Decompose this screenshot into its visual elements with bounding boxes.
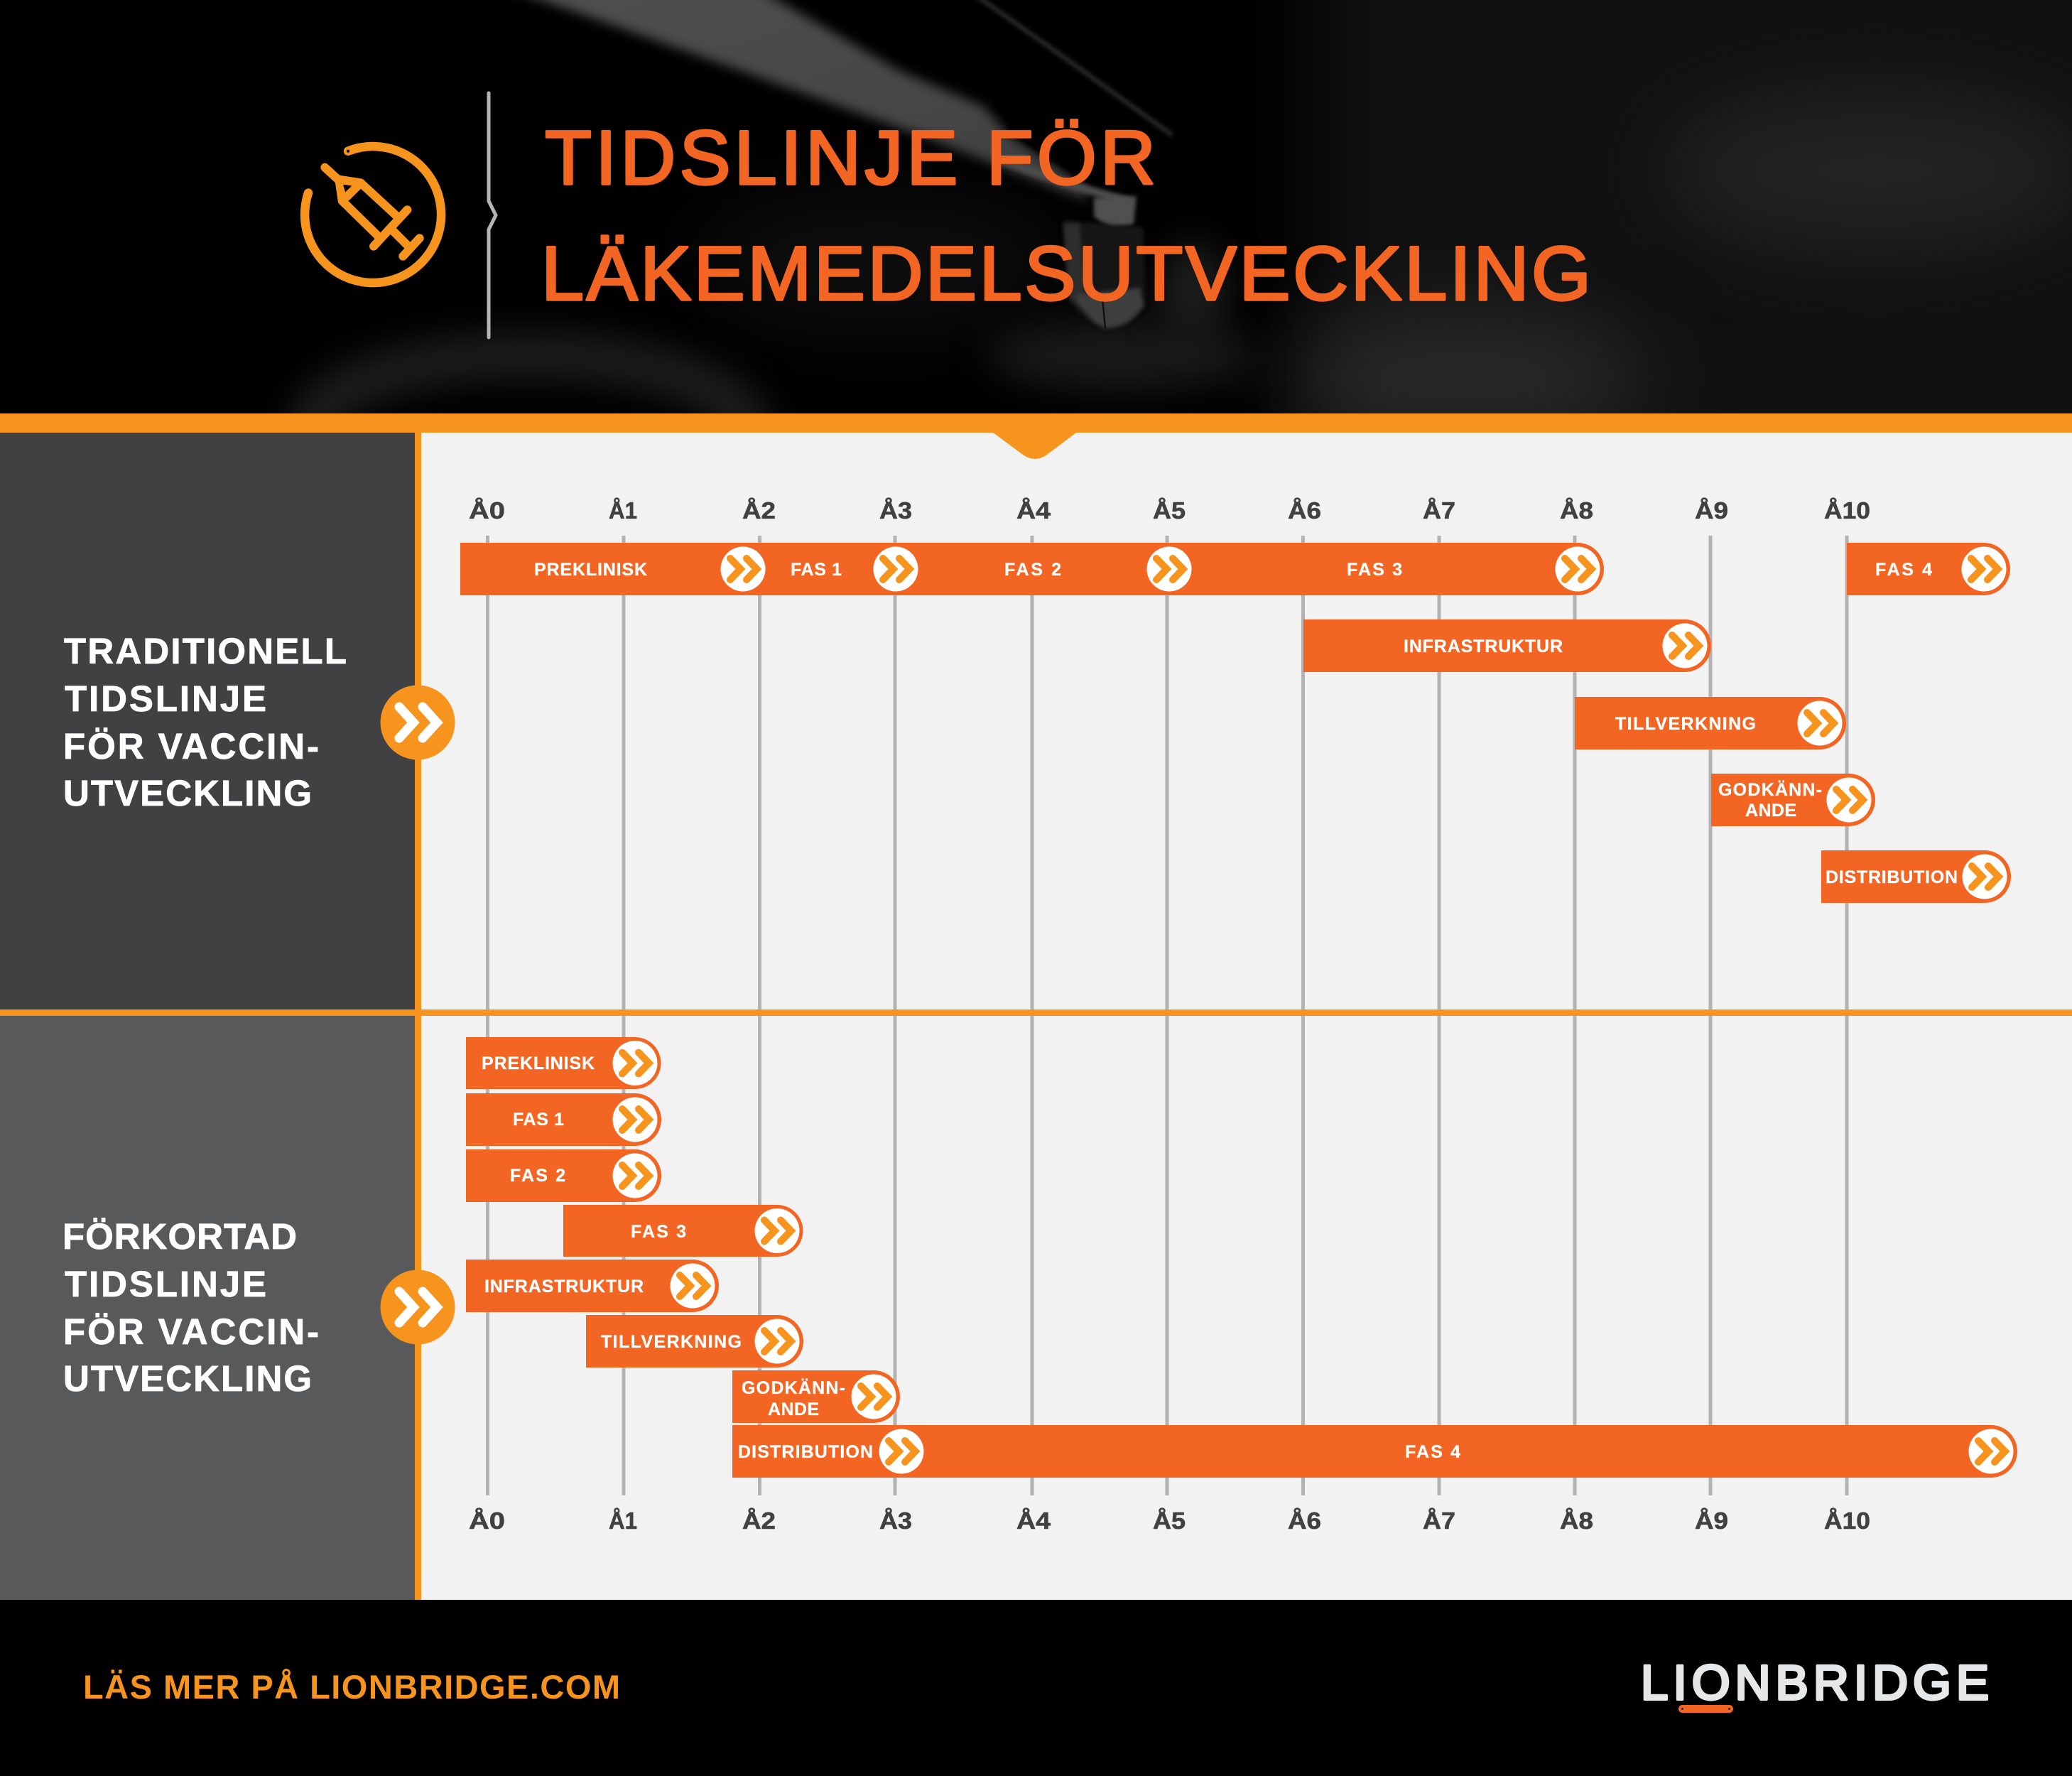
shortened: approval bar [732,1370,900,1423]
year labels top: Å10 [1824,497,1870,524]
panel: traditional timeline sidebar [0,433,415,1009]
year labels top [469,497,1870,524]
traditional: preclinical through phase 3 bar [460,543,1604,595]
year labels top: Å8 [1560,497,1593,524]
year labels bottom: Å9 [1695,1507,1728,1534]
traditional: distribution bar: DISTRIBUTION [1826,867,1958,887]
year labels top: Å4 [1016,497,1051,524]
traditional: preclinical through phase 3 bar: FAS 3 [1347,560,1402,580]
chart area background [421,433,2072,1600]
shortened: infrastructure bar [466,1260,719,1312]
footer link text: LÄS MER PÅ LIONBRIDGE.COM [83,1668,620,1706]
shortened: phase 1 bar: FAS 1 [513,1110,564,1130]
panel: shortened timeline sidebar: FÖRKORTAD [63,1216,297,1257]
traditional: infrastructure bar [1303,619,1711,672]
shortened: distribution and phase 4 bar [732,1425,2017,1478]
year labels bottom: Å4 [1016,1507,1051,1534]
shortened: infrastructure bar: INFRASTRUKTUR [484,1277,644,1296]
icon: syringe in circle [305,146,441,283]
year labels top: Å7 [1423,497,1455,524]
panel: traditional timeline sidebar: UTVECKLING [63,773,312,813]
shortened: phase 2 bar [466,1149,661,1202]
shortened: phase 2 bar: FAS 2 [510,1166,565,1186]
year labels bottom: Å2 [742,1507,776,1534]
year labels bottom [469,1507,1870,1534]
traditional: approval bar: GODKÄNN- [1718,780,1822,800]
panel: traditional timeline sidebar: TRADITIONELL [64,631,347,671]
traditional: infrastructure bar: INFRASTRUKTUR [1404,637,1563,656]
traditional: preclinical through phase 3 bar: PREKLINISK [534,560,647,580]
traditional: approval bar [1711,774,1875,826]
traditional: phase 4 bar: FAS 4 [1875,560,1932,580]
title: TIDSLINJE FÖR [545,114,1156,200]
traditional: manufacturing bar: TILLVERKNING [1615,714,1756,734]
traditional: phase 4 bar [1847,543,2010,595]
shortened: preclinical bar [466,1037,661,1089]
shortened: phase 3 bar: FAS 3 [631,1222,686,1242]
shortened: phase 3 bar [563,1205,803,1257]
shortened: preclinical bar: PREKLINISK [482,1054,595,1073]
panel: shortened timeline sidebar: FÖR VACCIN- [63,1311,319,1352]
shortened: distribution and phase 4 bar: FAS 4 [1405,1442,1460,1462]
logo: Lionbridge: LIONBRIDGE [1641,1655,1989,1710]
year labels bottom: Å0 [469,1507,505,1534]
year labels top: Å9 [1695,497,1728,524]
panel: shortened timeline sidebar: TIDSLINJE [65,1264,266,1304]
year labels bottom: Å7 [1423,1507,1455,1534]
traditional: approval bar: ANDE [1745,801,1796,821]
icon: arrow badge shortened [381,1270,455,1344]
year labels top: Å6 [1288,497,1321,524]
traditional: preclinical through phase 3 bar: FAS 2 [1004,560,1061,580]
year labels top: Å2 [742,497,776,524]
title: LÄKEMEDELSUTVECKLING [541,230,1591,316]
year labels bottom: Å8 [1560,1507,1593,1534]
title [541,114,1591,316]
year labels top: Å5 [1153,497,1186,524]
shortened: manufacturing bar [586,1315,803,1368]
panel: traditional timeline sidebar: FÖR VACCIN- [63,726,319,767]
shortened: approval bar: GODKÄNN- [742,1378,845,1398]
traditional: distribution bar [1821,850,2011,903]
footer panel [0,1600,2072,1776]
divider line with notch [489,93,496,337]
year labels top: Å0 [469,497,505,524]
panel: shortened timeline sidebar: UTVECKLING [63,1358,312,1399]
year labels bottom: Å6 [1288,1507,1321,1534]
year labels bottom: Å3 [879,1507,912,1534]
traditional: manufacturing bar [1575,697,1846,749]
header photo background: dripping faucet [283,0,2072,413]
year grid lines [487,536,1847,1495]
shortened: manufacturing bar: TILLVERKNING [601,1332,742,1352]
year labels bottom: Å5 [1153,1507,1186,1534]
panel: traditional timeline sidebar: TIDSLINJE [65,678,266,719]
year labels bottom: Å10 [1824,1507,1870,1534]
year labels bottom: Å1 [609,1507,637,1534]
shortened: distribution and phase 4 bar: DISTRIBUTION [738,1442,873,1462]
year labels top: Å1 [609,497,637,524]
shortened: approval bar: ANDE [768,1399,819,1419]
panel: top orange band [0,413,2072,459]
traditional: preclinical through phase 3 bar: FAS 1 [791,560,842,580]
year labels top: Å3 [879,497,912,524]
orange panel dividers [0,433,2072,1600]
icon: arrow badge traditional [381,685,455,760]
panel: shortened timeline sidebar [0,1016,415,1600]
shortened: phase 1 bar [466,1093,661,1146]
